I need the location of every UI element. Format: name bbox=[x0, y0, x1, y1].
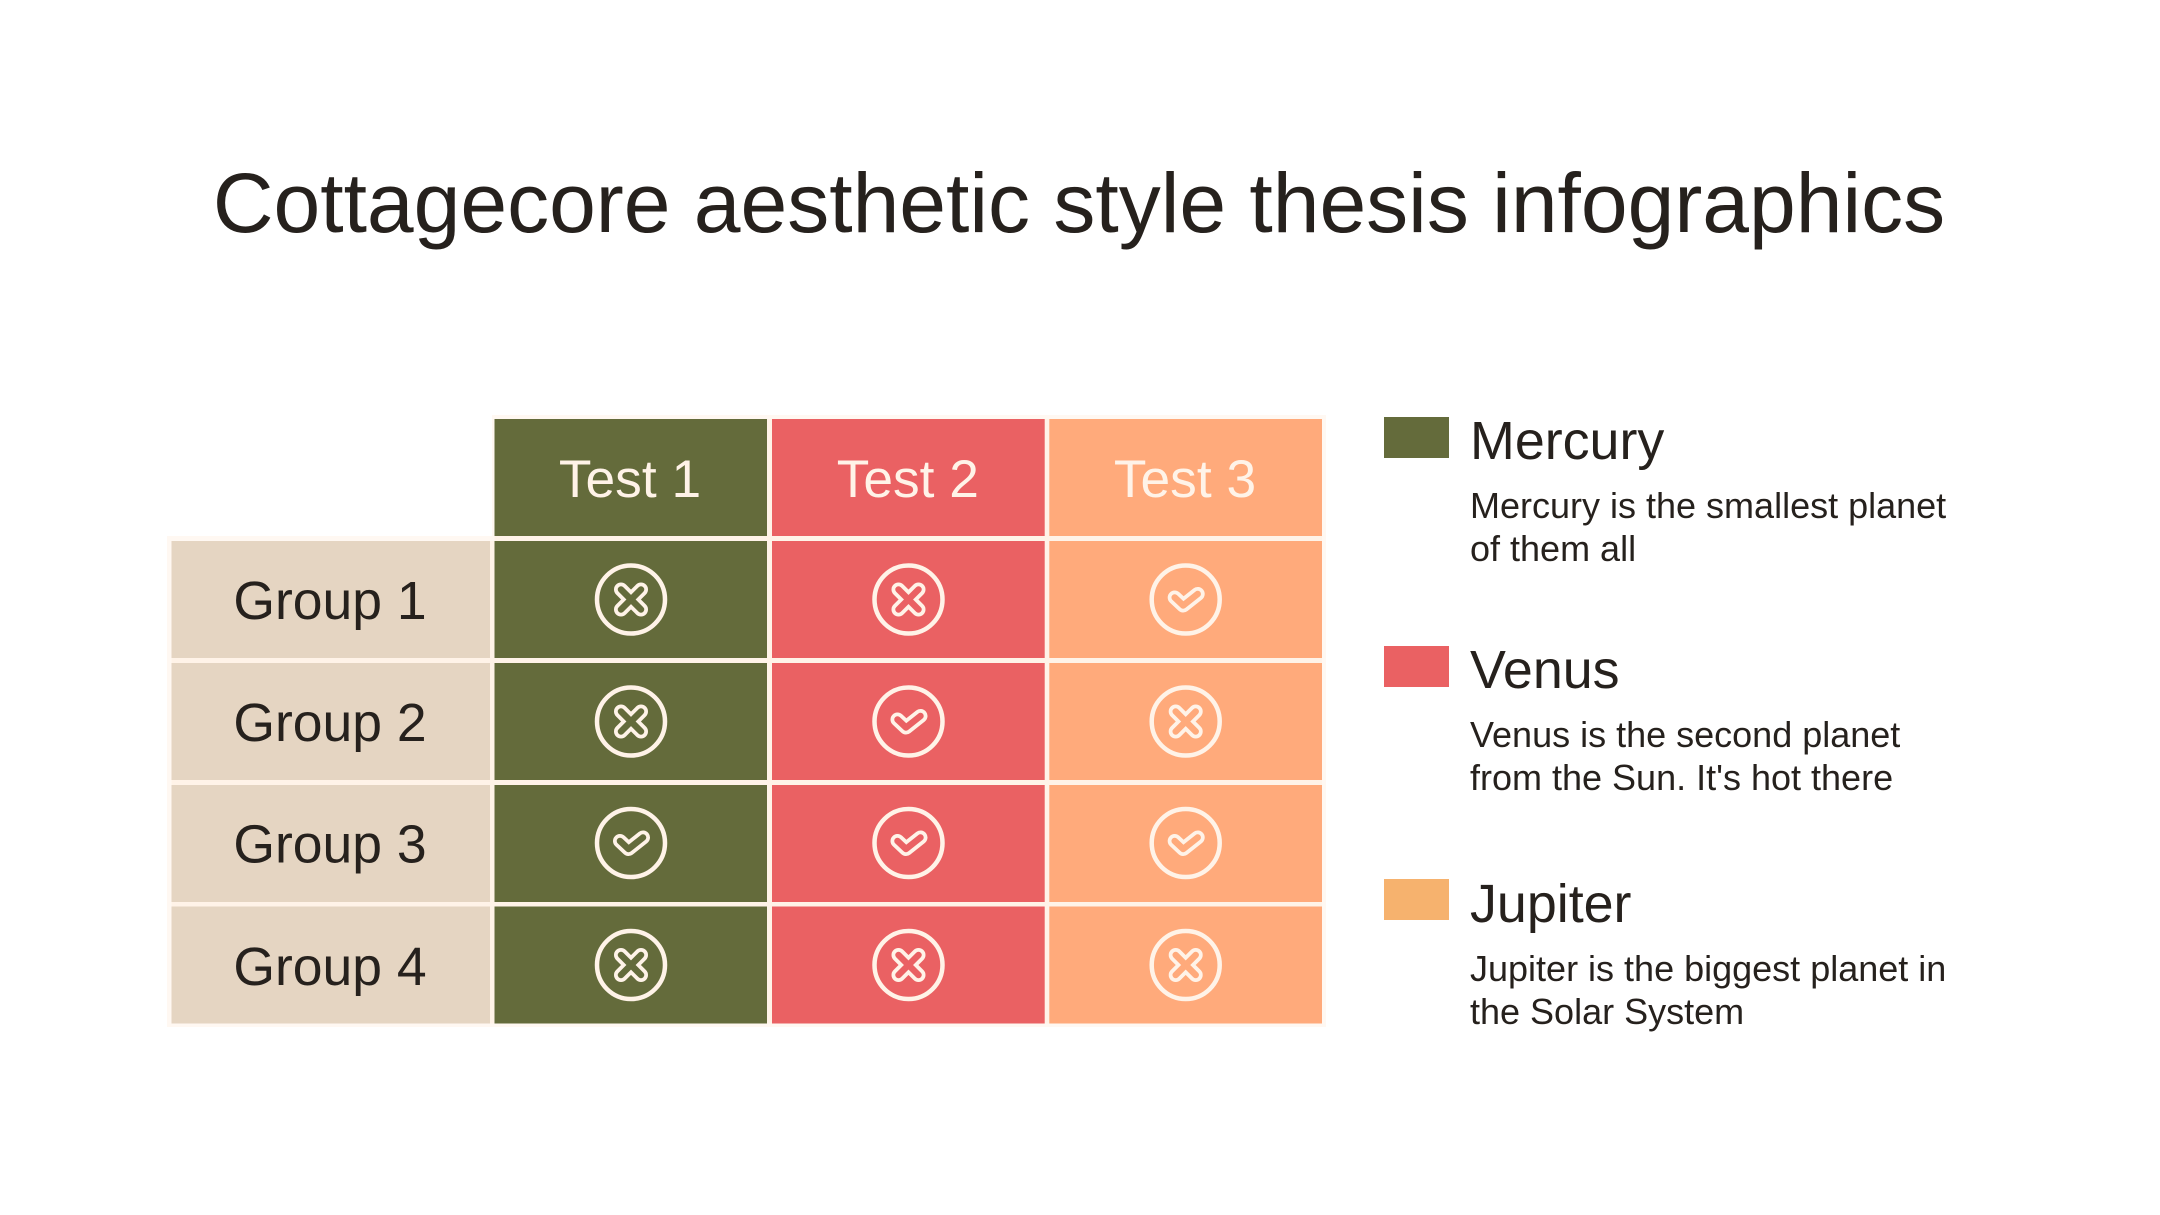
label: group 3 bbox=[172, 785, 490, 902]
header: test 2: Test 2 bbox=[837, 450, 979, 509]
header: test 3: Test 3 bbox=[1114, 450, 1256, 509]
cell: group 4 test 2 cross bbox=[772, 906, 1045, 1024]
cell: group 2 test 3 cross bbox=[1049, 663, 1322, 780]
cell: group 2 test 2 check bbox=[772, 663, 1045, 780]
swatch: jupiter bbox=[1384, 879, 1449, 920]
table bbox=[167, 415, 1326, 1027]
legend heading: jupiter: Jupiter bbox=[1470, 874, 1632, 934]
row: group 2 bbox=[172, 663, 1322, 780]
legend text: jupiter: the Solar System bbox=[1470, 991, 1744, 1032]
row: group 1 bbox=[172, 541, 1322, 658]
legend text: mercury: of them all bbox=[1470, 528, 1636, 569]
table inner grid lines bbox=[172, 419, 1322, 1024]
cell: group 1 test 1 cross bbox=[494, 541, 767, 658]
cell: group 2 test 1 cross bbox=[494, 663, 767, 780]
cell: group 3 test 3 check bbox=[1049, 785, 1322, 902]
legend heading: venus: Venus bbox=[1470, 640, 1620, 700]
label: group 4: Group 4 bbox=[233, 938, 427, 997]
header: test 2 bbox=[772, 419, 1045, 536]
label: group 4 bbox=[172, 906, 490, 1024]
row: group 4 bbox=[172, 906, 1322, 1024]
header: test 1 bbox=[494, 419, 767, 536]
label: group 2 bbox=[172, 663, 490, 780]
table outer edge bbox=[167, 415, 1326, 1027]
label: group 1 bbox=[172, 541, 490, 658]
legend: venus bbox=[1384, 640, 1900, 798]
cell: group 3 test 1 check bbox=[494, 785, 767, 902]
cell: group 1 test 3 check bbox=[1049, 541, 1322, 658]
row: group 3 bbox=[172, 785, 1322, 902]
legend heading: mercury: Mercury bbox=[1470, 411, 1664, 471]
title: Cottagecore aesthetic style thesis infographics bbox=[213, 156, 1945, 250]
header: test 1: Test 1 bbox=[559, 450, 701, 509]
header: test 3 bbox=[1049, 419, 1322, 536]
label: group 2: Group 2 bbox=[233, 694, 427, 753]
label: group 3: Group 3 bbox=[233, 816, 427, 874]
cell: group 1 test 2 cross bbox=[772, 541, 1045, 658]
cell: group 4 test 1 cross bbox=[494, 906, 767, 1024]
swatch: venus bbox=[1384, 646, 1449, 687]
legend text: mercury: Mercury is the smallest planet bbox=[1470, 485, 1946, 526]
label: group 1: Group 1 bbox=[233, 572, 427, 631]
cell: group 4 test 3 cross bbox=[1049, 906, 1322, 1024]
legend: mercury bbox=[1384, 411, 1946, 569]
cell: group 3 test 2 check bbox=[772, 785, 1045, 902]
legend: jupiter bbox=[1384, 874, 1946, 1032]
legend text: venus: from the Sun. It's hot there bbox=[1470, 757, 1893, 798]
swatch: mercury bbox=[1384, 417, 1449, 458]
legend text: venus: Venus is the second planet bbox=[1470, 714, 1900, 755]
legend text: jupiter: Jupiter is the biggest planet in bbox=[1470, 948, 1946, 989]
